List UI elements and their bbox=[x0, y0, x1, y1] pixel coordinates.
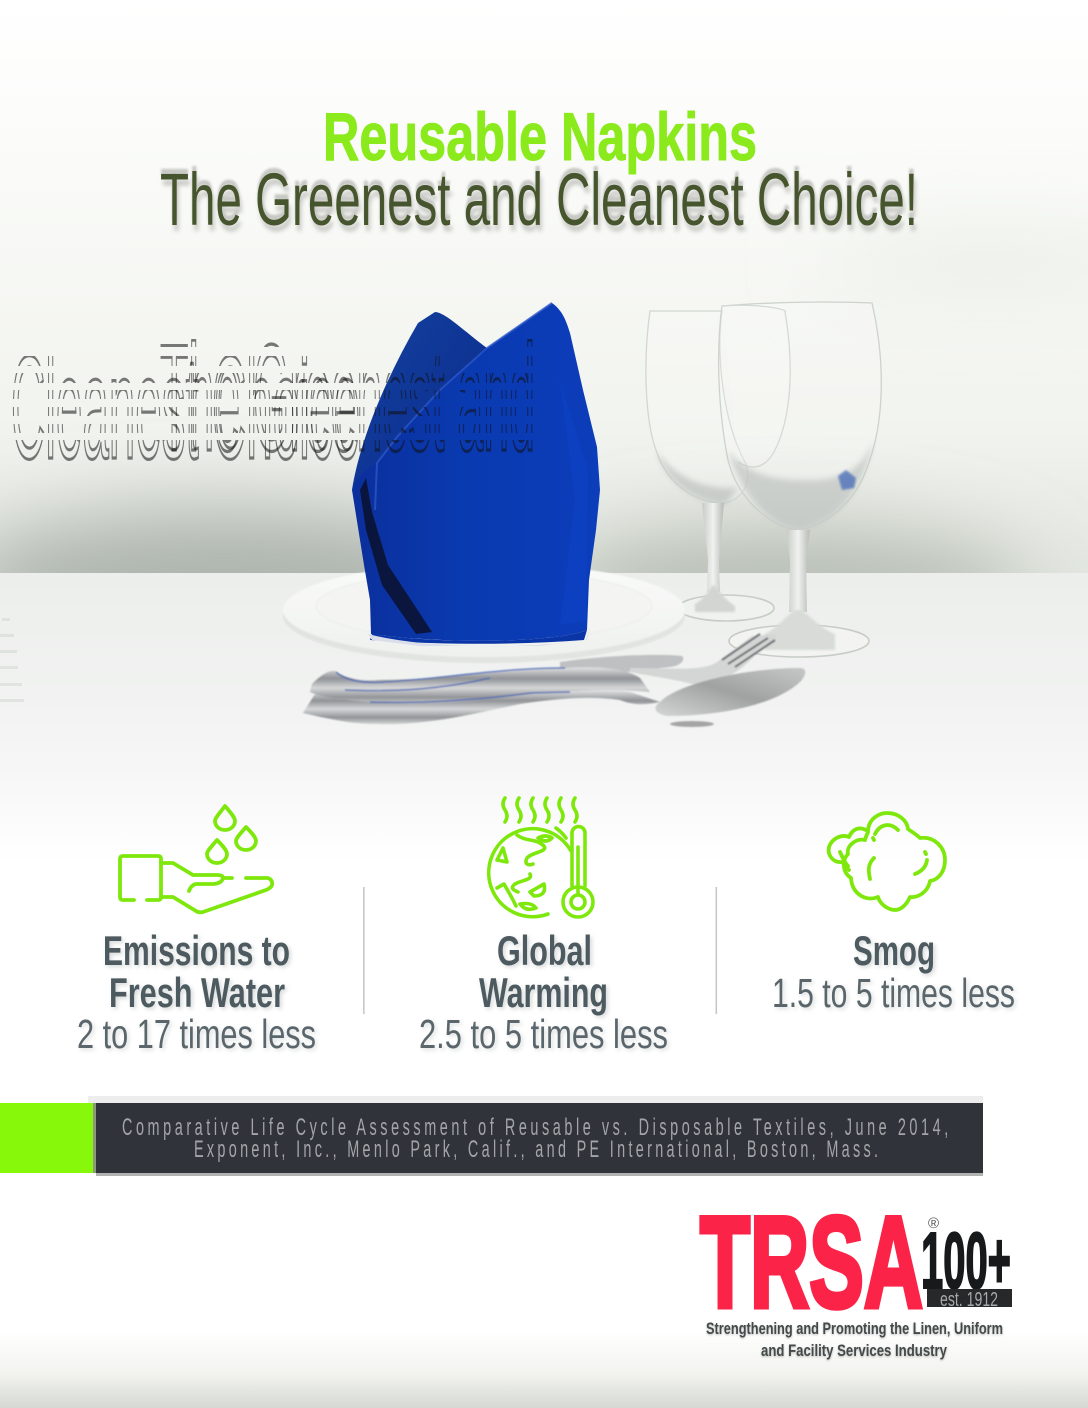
misprinted ghost text bbox=[12, 339, 533, 461]
title line 1: Reusable Napkins bbox=[323, 99, 757, 175]
left glass bbox=[646, 311, 774, 621]
spoon bbox=[656, 668, 805, 716]
citation text: Comparative Life Cycle Assessment of Reusable vs. Disposable Textiles, June 2014, bbox=[122, 1114, 948, 1141]
stat column: global warming bbox=[419, 798, 670, 1059]
heading bbox=[853, 927, 937, 976]
logo wordmark: TRSA bbox=[700, 1189, 923, 1335]
TRSA logo bbox=[700, 1189, 1012, 1361]
fork bbox=[630, 634, 776, 686]
napkin front body bbox=[352, 303, 600, 641]
heading bbox=[103, 927, 292, 1018]
heading: Global bbox=[497, 927, 592, 974]
stat column: smog bbox=[772, 813, 1017, 1018]
heading: Emissions to bbox=[105, 929, 292, 976]
value: 2.5 to 5 times less bbox=[421, 1013, 670, 1059]
green accent block bbox=[0, 1103, 93, 1173]
heading: Emissions to bbox=[103, 927, 290, 974]
tagline: and Facility Services Industry bbox=[761, 1342, 947, 1361]
photo: dinner plate bbox=[283, 563, 685, 663]
citation text bbox=[122, 1114, 948, 1163]
napkin back fold bbox=[352, 312, 487, 490]
ghost line: The Greenest and: The Greenest and bbox=[160, 314, 535, 483]
upper handle bbox=[310, 667, 650, 705]
background photo wall bbox=[0, 173, 1088, 573]
napkin dark fold shadow bbox=[360, 478, 432, 634]
heading: Smog bbox=[853, 927, 935, 974]
heading: Global bbox=[499, 929, 594, 976]
icon: smog cloud bbox=[829, 813, 945, 910]
photo: plate rim under napkin bbox=[368, 628, 590, 646]
knife bbox=[560, 655, 683, 674]
dark citation panel bbox=[96, 1103, 983, 1173]
icon: earth with thermometer and steam bbox=[489, 798, 593, 917]
tagline bbox=[706, 1319, 1003, 1361]
citation text: Exponent, Inc., Menlo Park, Calif., and PE International, Boston, Mass. bbox=[194, 1136, 878, 1163]
value: 2 to 17 times less bbox=[77, 1011, 316, 1057]
right glass bbox=[719, 302, 881, 657]
photo: wine glasses bbox=[646, 302, 881, 657]
tagline: and Facility Services Industry bbox=[761, 1341, 947, 1360]
photo: cutlery bbox=[303, 634, 805, 727]
value: 2 to 17 times less bbox=[79, 1013, 318, 1059]
heading: Smog bbox=[855, 929, 937, 976]
heading bbox=[479, 927, 610, 1018]
title bbox=[160, 99, 920, 247]
footer page fade bbox=[0, 1330, 1088, 1408]
lower handle bbox=[303, 690, 660, 724]
icon: hand with water drops bbox=[120, 806, 272, 912]
registered mark: ® bbox=[928, 1215, 939, 1232]
heading: Warming bbox=[479, 969, 608, 1016]
est. 1912 tag: est. 1912 bbox=[940, 1289, 998, 1311]
ghost line: Cleanest Choice: Cleanest Choice bbox=[11, 325, 360, 490]
heading: Fresh Water bbox=[109, 969, 285, 1016]
heading: Fresh Water bbox=[111, 971, 287, 1018]
source citation bar bbox=[0, 1096, 983, 1176]
photo: blue folded napkin bbox=[352, 303, 600, 644]
background table surface bbox=[0, 573, 1088, 863]
stat column: emissions to fresh water bbox=[77, 806, 318, 1059]
value: 2.5 to 5 times less bbox=[419, 1011, 668, 1057]
stray ghost marks at left edge bbox=[0, 618, 24, 702]
heading: Warming bbox=[481, 971, 610, 1018]
